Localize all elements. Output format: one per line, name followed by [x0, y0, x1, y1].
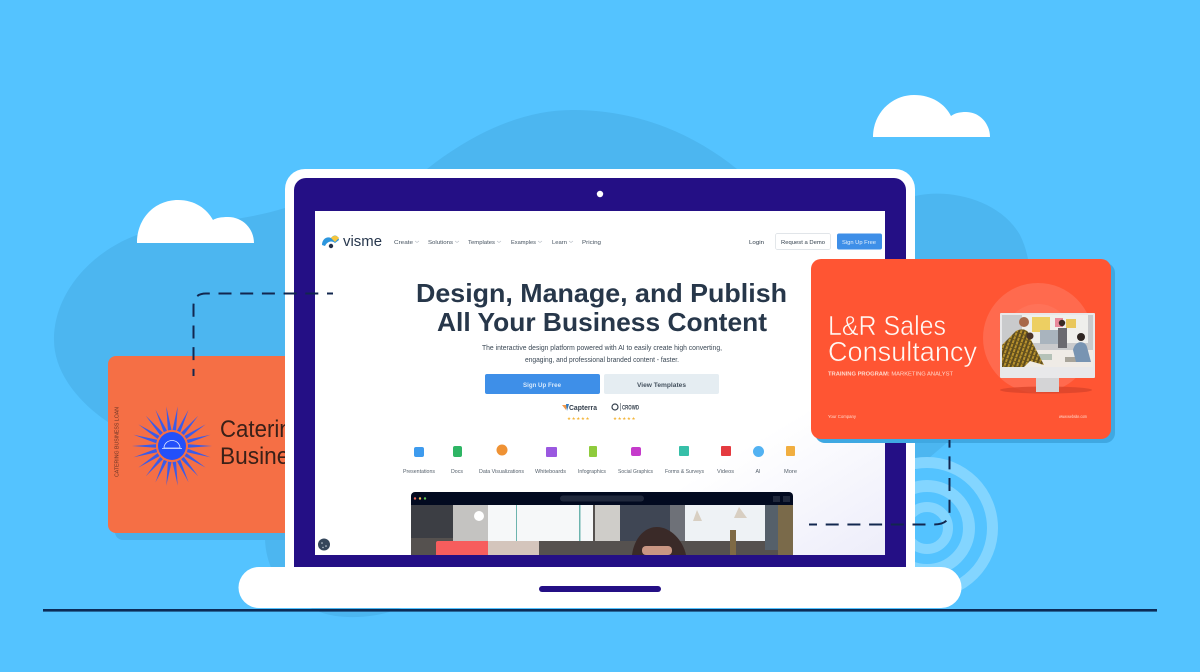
dashed connector: left	[194, 294, 333, 376]
request a demo button	[776, 234, 830, 250]
concentric rings	[862, 462, 992, 594]
hero subtext: The interactive design platform powered with AI to easily create high converting,	[482, 345, 722, 352]
cookie icon	[318, 538, 330, 550]
right card: sales consultancy	[811, 259, 1115, 443]
ground line	[43, 609, 1157, 612]
nav links: Solutions	[428, 240, 453, 246]
icon: blue sunburst	[132, 406, 212, 486]
nav links	[394, 240, 601, 245]
category: presentations	[403, 447, 435, 475]
capterra rating: Capterra	[569, 405, 597, 412]
capterra rating	[562, 404, 597, 421]
category: ai	[753, 446, 764, 475]
nav bar	[322, 233, 882, 250]
nav links: Examples	[511, 240, 536, 246]
sign up button	[837, 234, 882, 250]
hero heading: Design, Manage, and Publish	[416, 278, 787, 308]
visme logo: visme	[343, 233, 382, 250]
g2 crowd rating	[612, 403, 639, 421]
visme logo	[322, 235, 382, 248]
nav links: Templates	[468, 240, 495, 246]
category: data visualizations	[479, 444, 524, 475]
card title	[221, 420, 285, 464]
website screen	[315, 211, 885, 562]
product video mockup	[411, 492, 793, 562]
category: more	[784, 446, 797, 475]
category: videos: Videos	[717, 469, 734, 475]
vertical card label: CATERING BUSINESS LOAN	[114, 407, 120, 477]
laptop bezel	[294, 178, 906, 568]
button: sign up free	[485, 374, 600, 394]
base notch	[539, 586, 661, 592]
category: docs: Docs	[451, 469, 463, 475]
category: whiteboards: Whiteboards	[535, 469, 566, 475]
hero subtext	[482, 345, 722, 364]
category: social graphics: Social Graphics	[618, 469, 653, 475]
product categories	[403, 444, 797, 475]
category: whiteboards	[535, 447, 566, 475]
camera	[597, 191, 603, 197]
hero subtext: engaging, and professional branded content - faster.	[525, 357, 679, 364]
cloud: right	[873, 95, 990, 137]
hero heading: All Your Business Content	[437, 307, 767, 337]
category: more: More	[784, 469, 797, 475]
category: forms and surveys: Forms & Surveys	[665, 469, 704, 475]
g2 crowd rating: CROWD	[622, 406, 639, 412]
background blob	[54, 110, 1030, 617]
sign up button: Sign Up Free	[842, 240, 876, 246]
dashed connector: right	[809, 440, 950, 524]
laptop base	[238, 567, 961, 608]
nav links: Pricing	[582, 240, 601, 246]
card title: L&R Sales	[828, 310, 946, 341]
capterra rating: ★★★★★	[567, 416, 591, 421]
category: forms and surveys	[665, 446, 704, 475]
g2 crowd rating: ★★★★★	[613, 416, 637, 421]
category: videos	[717, 446, 734, 475]
category: social graphics	[618, 447, 653, 475]
category: presentations: Presentations	[403, 469, 435, 475]
nav links: Create	[394, 240, 413, 246]
nav chevrons	[415, 241, 573, 242]
button: view templates	[604, 374, 719, 394]
card footer right: www.website.com	[1059, 414, 1087, 419]
card subtitle: TRAINING PROGRAM: MARKETING ANALYST	[828, 372, 953, 378]
monitor illustration	[983, 283, 1095, 394]
card footer left: Your Company	[828, 414, 857, 419]
card title: Business	[220, 443, 312, 470]
nav links: Learn	[552, 240, 567, 246]
category: docs	[451, 446, 463, 475]
category: infographics: Infographics	[578, 469, 606, 475]
hero heading	[418, 283, 786, 332]
category: data visualizations: Data Visualizations	[479, 469, 524, 475]
button: sign up free: Sign Up Free	[523, 382, 561, 389]
card title: Catering	[220, 416, 304, 443]
card title: Consultancy	[828, 336, 977, 367]
button: view templates: View Templates	[637, 382, 686, 389]
card title	[828, 310, 977, 367]
category: ai: AI	[756, 469, 761, 475]
request a demo button: Request a Demo	[781, 240, 825, 246]
login: Login	[749, 240, 764, 246]
laptop	[238, 169, 961, 608]
left card: catering business	[108, 356, 285, 540]
category: infographics	[578, 446, 606, 475]
laptop lid	[285, 169, 915, 568]
cloud: left	[137, 200, 254, 243]
